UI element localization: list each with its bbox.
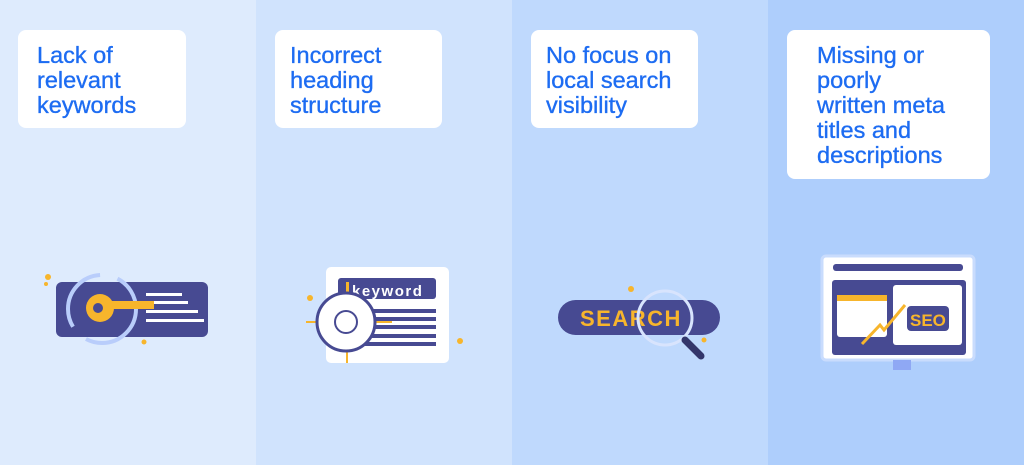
heading: no focus on local search visibility: local search (546, 67, 671, 93)
icon: search bar with magnifier: SEARCH (580, 306, 682, 331)
icon: keyword document (306, 267, 463, 363)
heading: missing meta titles: titles and (817, 117, 911, 143)
panel: card 3 (531, 30, 698, 128)
heading: no focus on local search visibility: visibility (546, 92, 627, 118)
icon: SEO monitor: SEO (910, 311, 946, 330)
panel: card 2 (275, 30, 442, 128)
heading: incorrect heading structure: Incorrect (290, 42, 382, 68)
heading: no focus on local search visibility: No focus on (546, 42, 671, 68)
heading: missing meta titles: written meta (816, 92, 946, 118)
heading: missing meta titles: Missing or (817, 42, 924, 68)
heading: missing meta titles: descriptions (817, 142, 942, 168)
icon: key (44, 274, 208, 344)
heading: lack of relevant keywords: keywords (37, 92, 136, 118)
heading: incorrect heading structure: heading (290, 67, 374, 93)
heading: lack of relevant keywords: relevant (37, 67, 121, 93)
icon: SEO monitor (822, 256, 974, 370)
panel: card 1 (18, 30, 186, 128)
heading: missing meta titles: poorly (817, 67, 881, 93)
icon: keyword document: keyword (352, 283, 423, 300)
heading: lack of relevant keywords: Lack of (37, 42, 113, 68)
panel: card 4 (787, 30, 990, 179)
icon: search bar with magnifier (558, 286, 720, 356)
heading: incorrect heading structure: structure (290, 92, 381, 118)
